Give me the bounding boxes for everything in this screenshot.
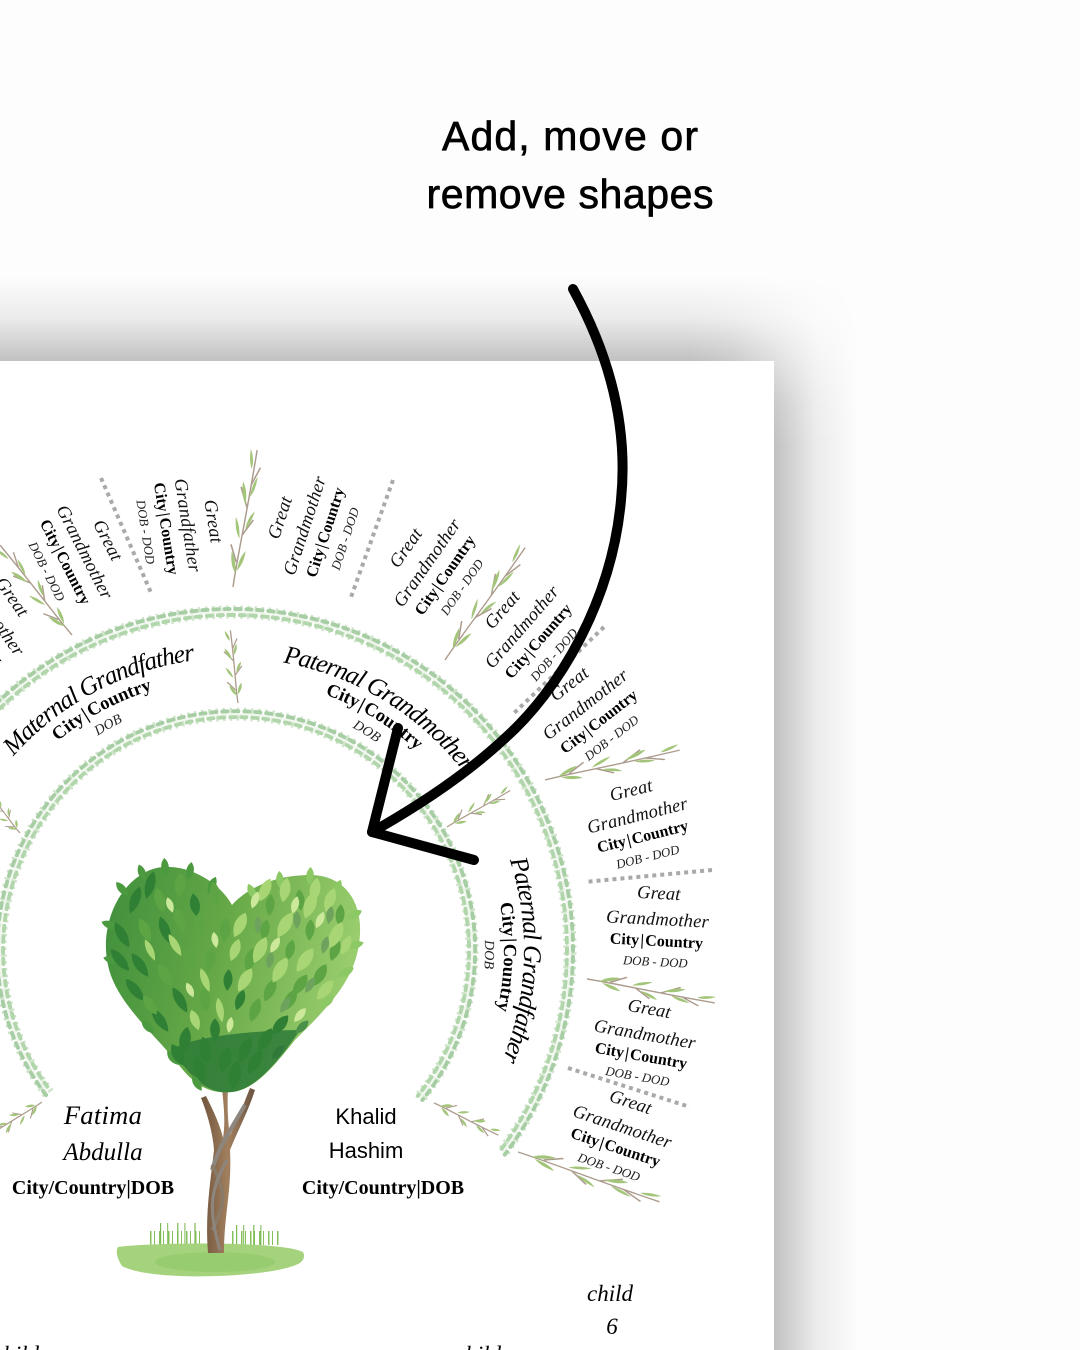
crown shaded base band (172, 1030, 300, 1092)
great grandparent C (131, 473, 230, 580)
paternal grandfather curved label: City | Country (494, 903, 517, 1012)
great grandparent K (558, 1077, 683, 1191)
great grandparent B (17, 490, 140, 621)
title (426, 113, 714, 217)
twig dividers (0, 448, 716, 1209)
great grandparent H: Great (608, 776, 655, 806)
great grandparent C: Grandfather (170, 477, 204, 574)
crown grey-green leaves on right lobe (254, 905, 335, 1015)
great grandparent E: Grandmother (390, 515, 466, 611)
great grandparent D: Grandmother (280, 473, 331, 578)
clipped child labels (0, 1342, 501, 1350)
great grandparent J (586, 991, 702, 1092)
maternal grandfather curved label: Maternal Grandfather (3, 647, 194, 756)
child 6 label (587, 1281, 633, 1339)
paternal grandfather curved label: Paternal Grandfather (505, 858, 542, 1064)
great grandparent F: City | Country (502, 601, 576, 682)
right parent name: Hashim (329, 1138, 403, 1163)
great grandparent K: Grandmother (570, 1102, 675, 1154)
crown base (106, 867, 360, 1092)
paper drop shadow (0, 276, 860, 1350)
great grandparent A (0, 549, 50, 683)
great grandparent I: City | Country (609, 931, 703, 952)
left parent name: Fatima (63, 1100, 142, 1130)
great grandparent F: Grandmother (481, 582, 564, 673)
great grandparent B: DOB - DOD (25, 539, 68, 604)
great grandparent B: Great (88, 517, 126, 565)
great grandparent F: Great (481, 587, 525, 633)
trunk (201, 1088, 255, 1253)
great grandparent B: City | Country (36, 517, 94, 608)
paternal grandfather curved label (484, 858, 542, 1064)
great grandparent C: City | Country (150, 481, 181, 576)
great grandparent C: Great (199, 498, 226, 545)
title: remove shapes (426, 171, 714, 217)
great grandparent E: Great (386, 524, 428, 572)
crown mid leaves (135, 872, 345, 1024)
great grandparent H (579, 769, 700, 876)
crown edge leaves right (245, 867, 365, 1061)
paternal grandmother curved label: City | Country (328, 685, 422, 749)
great grandparent K: DOB - DOD (575, 1150, 642, 1184)
great grandparent D: Great (265, 493, 297, 542)
great grandparent E: City | Country (412, 533, 479, 619)
paper sheet (0, 361, 774, 1350)
great grandparent B: Grandmother (52, 502, 116, 603)
dotted separators (101, 478, 712, 1107)
great grandparent G: DOB - DOD (581, 712, 642, 764)
great grandparent J: City | Country (594, 1040, 688, 1073)
great grandparent J: Great (626, 996, 673, 1023)
maternal grandfather curved label: City | Country (53, 682, 150, 738)
paternal grandfather curved label: DOB (484, 940, 494, 969)
great grandparent C: DOB - DOD (133, 498, 157, 566)
great grandparent I (604, 881, 711, 972)
right parent name: City/Country|DOB (302, 1177, 464, 1199)
left parent name: City/Country|DOB (12, 1177, 174, 1199)
great grandparent G: City | Country (557, 687, 641, 757)
maternal grandfather curved label: DOB (94, 714, 122, 736)
right parent name: Khalid (335, 1104, 397, 1129)
great grandparent F (462, 565, 594, 698)
great grandparent E (369, 500, 498, 634)
great grandparent H: Grandmother (585, 794, 691, 838)
great grandparent G (523, 645, 657, 775)
icon: heart shaped watercolor tree (100, 858, 365, 1276)
great grandparent D: City | Country (303, 486, 348, 580)
crown pale highlights (164, 890, 327, 1034)
paternal grandmother curved label: DOB (352, 720, 381, 742)
great grandparent K: Great (607, 1086, 655, 1119)
paternal grandmother curved label: Paternal Grandmother (282, 646, 470, 766)
right parent name (302, 1104, 464, 1199)
great grandparent D: DOB - DOD (328, 505, 362, 573)
crown dark leaves (107, 870, 292, 1090)
title: Add, move or (442, 113, 698, 159)
crown light leaves (142, 876, 355, 1032)
inner leaf wreath (0, 711, 475, 1100)
great grandparent D (255, 465, 368, 590)
left parent name: Abdulla (61, 1139, 143, 1166)
great grandparent G: Great (547, 663, 594, 706)
great grandparent H: City | Country (595, 818, 690, 857)
ground (117, 1234, 304, 1276)
great grandparent G: Grandmother (539, 665, 633, 745)
outer leaf wreath (0, 609, 573, 1155)
great grandparent E: DOB - DOD (437, 556, 487, 619)
left parent name (12, 1100, 174, 1199)
great grandparent I: DOB - DOD (622, 953, 689, 971)
child 6 label: child (587, 1281, 633, 1306)
child 6 label: 6 (606, 1314, 618, 1339)
arrow (372, 289, 623, 860)
great grandparent I: Grandmother (606, 907, 710, 933)
great grandparent H: DOB - DOD (614, 842, 682, 872)
crown edge leaves left (100, 858, 219, 1093)
great grandparent F: DOB - DOD (527, 625, 581, 685)
great grandparent J: DOB - DOD (603, 1064, 671, 1089)
great grandparent K: City | Country (568, 1125, 662, 1171)
great grandparent J: Grandmother (592, 1016, 698, 1054)
great grandparent I: Great (637, 883, 682, 905)
